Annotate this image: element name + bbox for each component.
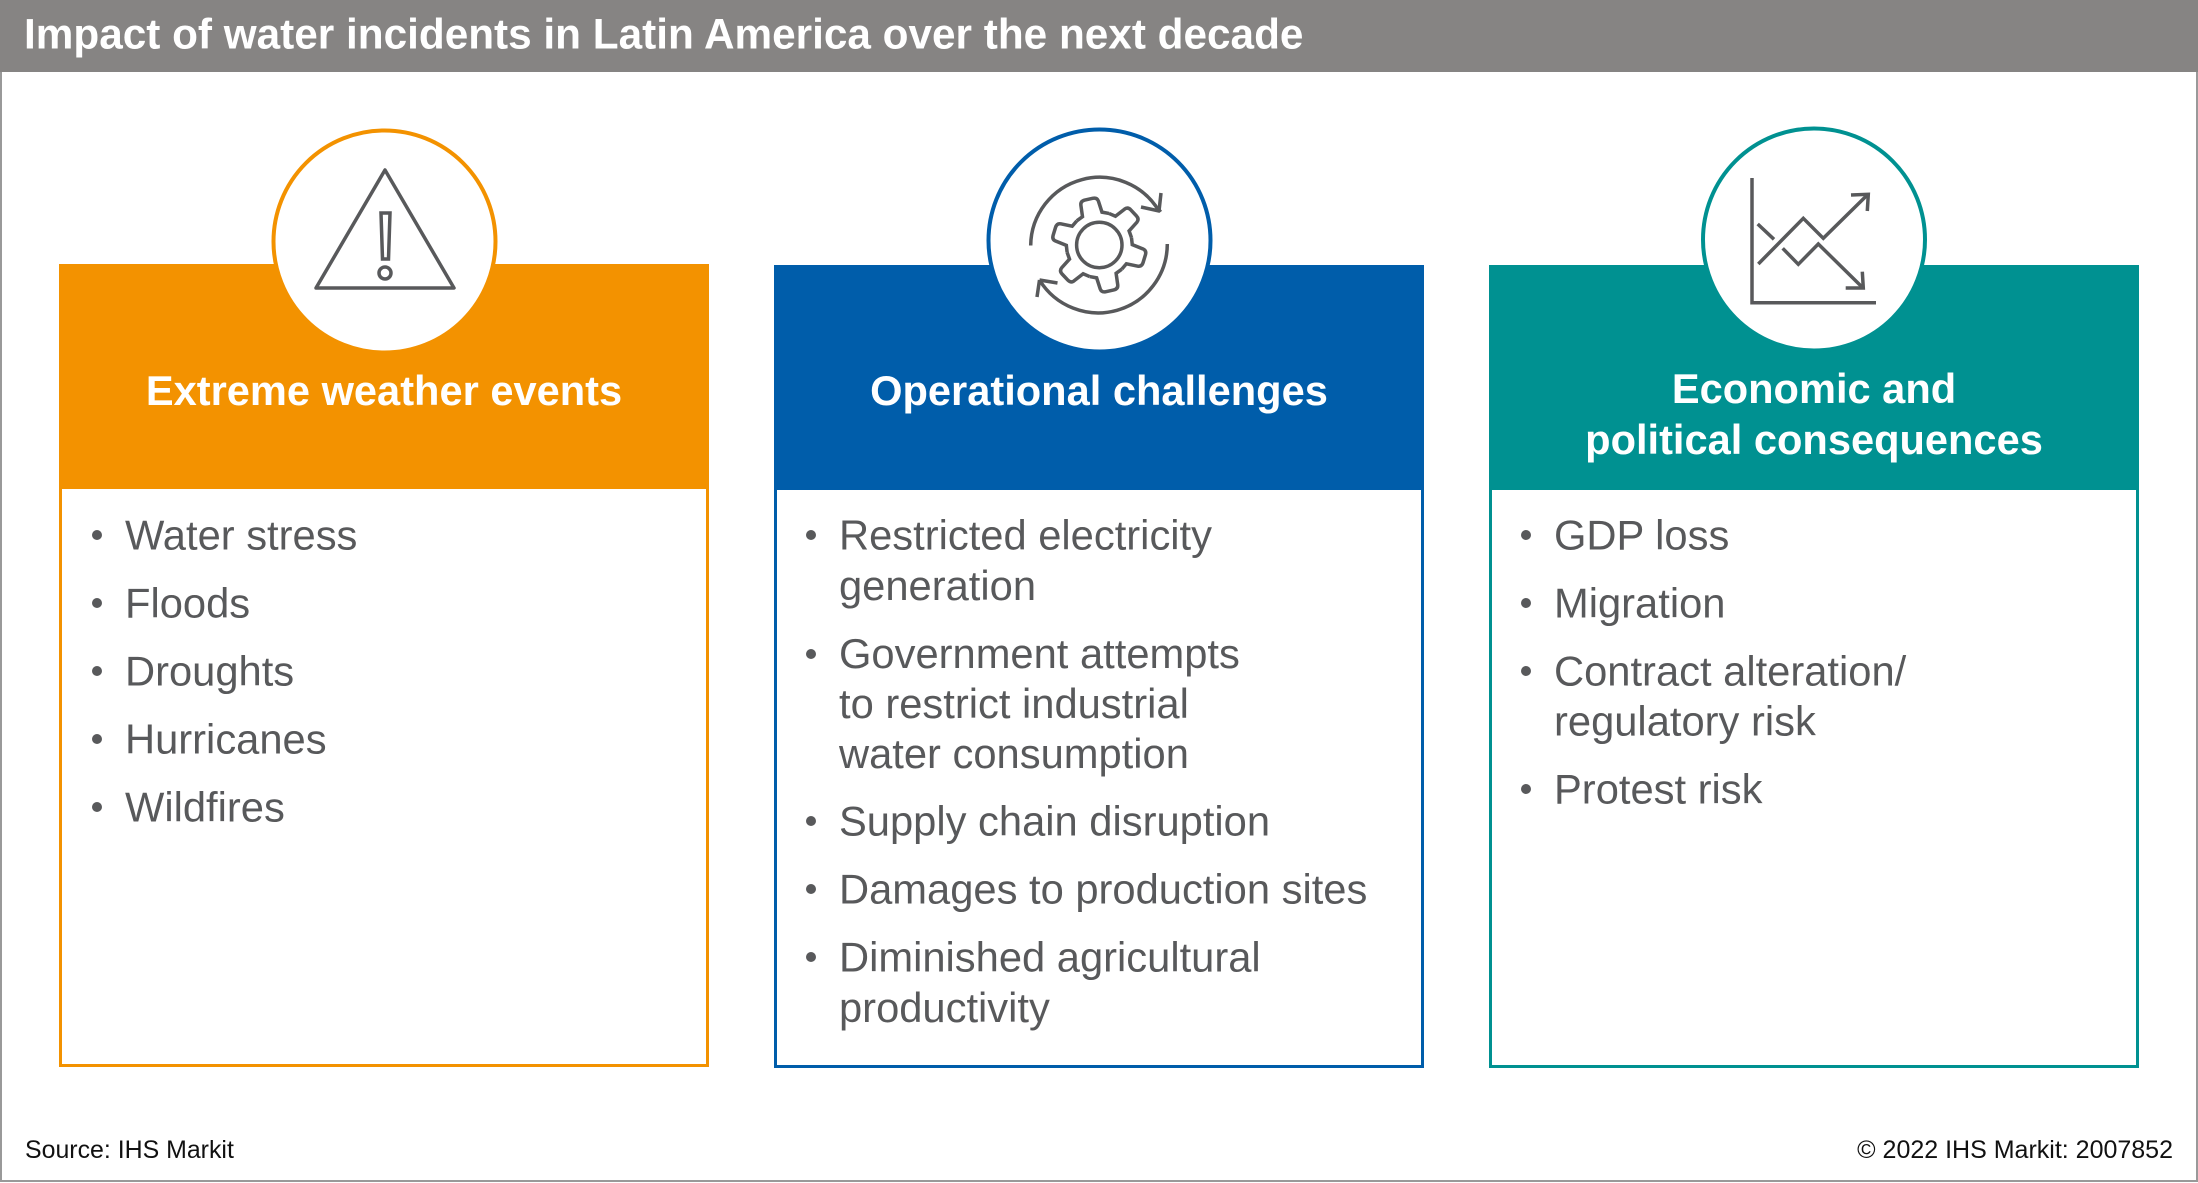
icon: line chart with up and down arrows — [1703, 128, 1925, 350]
heading: extreme weather events: Extreme weather events — [146, 367, 622, 414]
icon: gear with circular arrows — [988, 130, 1210, 352]
icon: warning triangle — [274, 130, 496, 352]
list: economic and political consequences: GDP loss — [1554, 512, 1729, 558]
list: operational challenges: to restrict industrial — [839, 680, 1189, 727]
heading: economic and political consequences — [1585, 365, 2043, 463]
list: operational challenges: Supply chain disruption — [839, 798, 1270, 844]
list: extreme weather events: Floods — [125, 580, 250, 626]
list: operational challenges: Damages to production sites — [839, 866, 1367, 912]
list: operational challenges: generation — [839, 562, 1036, 609]
list: extreme weather events: Wildfires — [125, 784, 285, 830]
heading: economic and political consequences: Economic and — [1672, 365, 1956, 412]
list: economic and political consequences: regulatory risk — [1554, 698, 1816, 744]
title bar: Impact of water incidents in Latin America over the next decade — [24, 10, 1303, 58]
list: operational challenges: Restricted electricity — [839, 512, 1212, 558]
list: operational challenges: water consumption — [838, 730, 1189, 777]
list: economic and political consequences: Protest risk — [1554, 766, 1763, 812]
heading: operational challenges: Operational challenges — [870, 367, 1328, 414]
panel: operational challenges — [774, 130, 1424, 1066]
title bar — [0, 0, 2198, 72]
list: operational challenges: productivity — [839, 984, 1050, 1031]
list: economic and political consequences: Migration — [1554, 580, 1725, 626]
list: economic and political consequences: Contract alteration/ — [1554, 648, 1907, 694]
heading: economic and political consequences: political consequences — [1585, 416, 2043, 463]
panel: economic and political consequences — [1489, 128, 2139, 1066]
source note: Source: IHS Markit — [25, 1136, 234, 1164]
list: extreme weather events — [92, 512, 357, 830]
list: operational challenges: Government attempts — [839, 630, 1240, 677]
list: extreme weather events: Water stress — [125, 512, 357, 558]
list: extreme weather events: Hurricanes — [125, 716, 327, 762]
copyright note: © 2022 IHS Markit: 2007852 — [1857, 1136, 2173, 1164]
list: operational challenges — [806, 512, 1367, 1031]
list: economic and political consequences — [1521, 512, 1907, 812]
list: extreme weather events: Droughts — [125, 648, 294, 694]
panel: extreme weather events — [59, 130, 709, 1066]
list: operational challenges: Diminished agricultural — [839, 934, 1261, 980]
